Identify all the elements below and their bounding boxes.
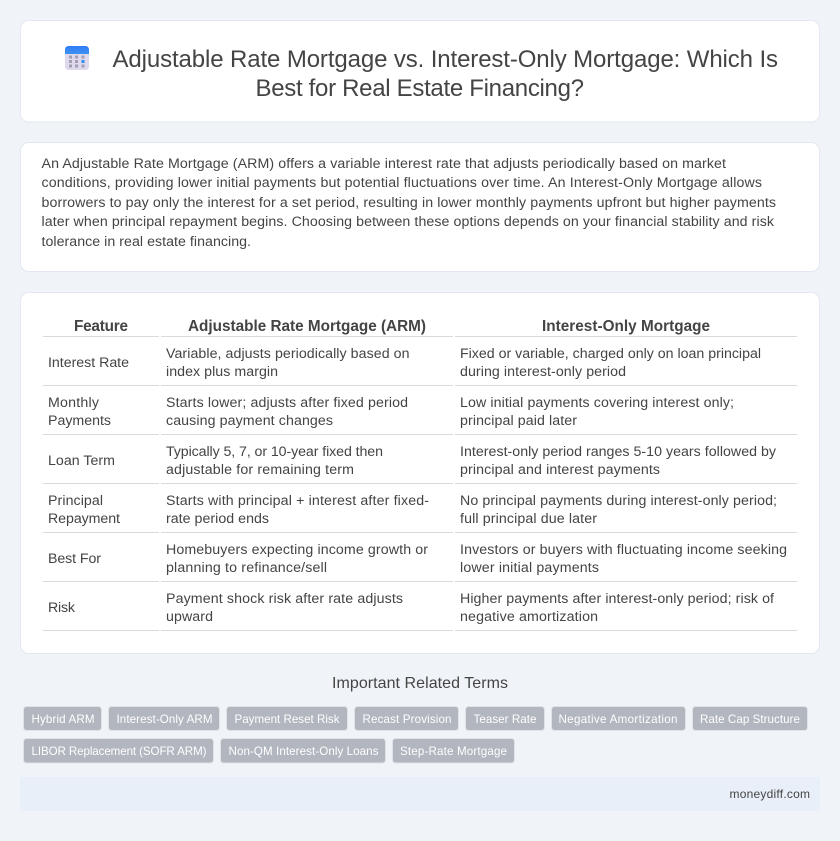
tags: related terms: Rate Cap Structure [700,713,800,726]
panel: header [20,20,820,122]
table row: best for: planning to refinance/sell [166,560,327,576]
table row: best for: Best For [48,551,101,567]
tags: related terms: Recast Provision [362,713,452,726]
table row: monthly payments: Payments [48,413,111,429]
tags: related terms: Hybrid ARM [32,713,94,726]
table row: loan term: Loan Term [48,453,115,469]
text block: summary: tolerance in real estate financing. [42,234,251,250]
table row: best for [48,542,787,576]
panel: summary paragraph [20,142,820,272]
table row: principal repayment: Repayment [48,511,120,527]
table row: interest rate: Interest Rate [48,355,129,371]
table row: risk: Risk [48,600,76,616]
text block: summary: conditions, providing lower initial payments but potential fluctuations over time. An Interest-Only Mortgage allows [42,175,762,191]
tags: related terms: LIBOR Replacement (SOFR ARM) [32,745,207,758]
heading: important related terms: Important Related Terms [332,675,508,692]
table row: interest rate [48,346,761,380]
table row: principal repayment: rate period ends [166,511,269,527]
tags: related terms: Non-QM Interest-Only Loans [228,745,379,758]
table row: interest rate: Variable, adjusts periodically based on [166,346,410,362]
text block: summary [42,156,776,250]
tags: related terms: Interest-Only ARM [116,713,212,726]
table row: loan term [48,444,777,478]
text block: summary: An Adjustable Rate Mortgage (ARM) offers a variable interest rate that adjusts periodically based on market [42,156,726,172]
table row: loan term: Typically 5, 7, or 10-year fixed then [166,444,383,460]
table row: principal repayment: full principal due later [460,511,597,527]
table row: risk: upward [166,609,213,625]
table header row: Adjustable Rate Mortgage (ARM) [188,318,426,335]
table header row [74,318,710,335]
table row: principal repayment: No principal payments during interest-only period; [460,493,777,509]
table row: best for: Homebuyers expecting income growth or [166,542,428,558]
tags: related terms [24,706,808,763]
table header row: Feature [74,318,128,335]
table row: monthly payments: Starts lower; adjusts after fixed period [166,395,408,411]
table row: monthly payments: Monthly [48,395,100,411]
table row: risk: Payment shock risk after rate adjusts [166,591,403,607]
table row: risk: negative amortization [460,609,598,625]
tags: related terms: Negative Amortization [558,713,678,726]
tags: related terms: Step-Rate Mortgage [400,745,507,758]
text block: summary: later when principal repayment begins. Choosing between these options depends on your financial stability and risk [42,214,775,230]
panel: comparison table [20,292,820,654]
table row: interest rate: Fixed or variable, charged only on loan principal [460,346,761,362]
footer bar [20,777,820,811]
table row: best for: lower initial payments [460,560,599,576]
table row: loan term: Interest-only period ranges 5-10 years followed by [460,444,777,460]
table row: loan term: adjustable for remaining term [166,462,354,478]
title: Adjustable Rate Mortgage vs. Interest-Only Mortgage: Which Is [112,46,778,73]
table row: loan term: principal and interest payments [460,462,660,478]
title [112,46,778,102]
table row: principal repayment: Starts with principal + interest after fixed- [166,493,429,509]
table row: interest rate: index plus margin [166,364,278,380]
table header row: Interest-Only Mortgage [542,318,710,335]
table row: principal repayment [48,493,777,527]
tags: related terms: Payment Reset Risk [234,713,340,726]
table row: risk [48,591,774,625]
title: Best for Real Estate Financing? [256,75,584,102]
text block: summary: borrowers to pay only the interest for a set period, resulting in lower monthly payments upfront but higher payments [42,195,776,211]
tags: related terms: Teaser Rate [474,713,536,726]
table row: monthly payments [48,395,734,429]
table row: best for: Investors or buyers with fluctuating income seeking [460,542,787,558]
table row: monthly payments: principal paid later [460,413,577,429]
table row: monthly payments: Low initial payments covering interest only; [460,395,734,411]
table row: interest rate: during interest-only period [460,364,626,380]
footer text: source: moneydiff.com [730,787,810,801]
table row: principal repayment: Principal [48,493,103,509]
table row: risk: Higher payments after interest-only period; risk of [460,591,774,607]
icon: calendar [65,46,89,70]
table row: monthly payments: causing payment changes [166,413,333,429]
